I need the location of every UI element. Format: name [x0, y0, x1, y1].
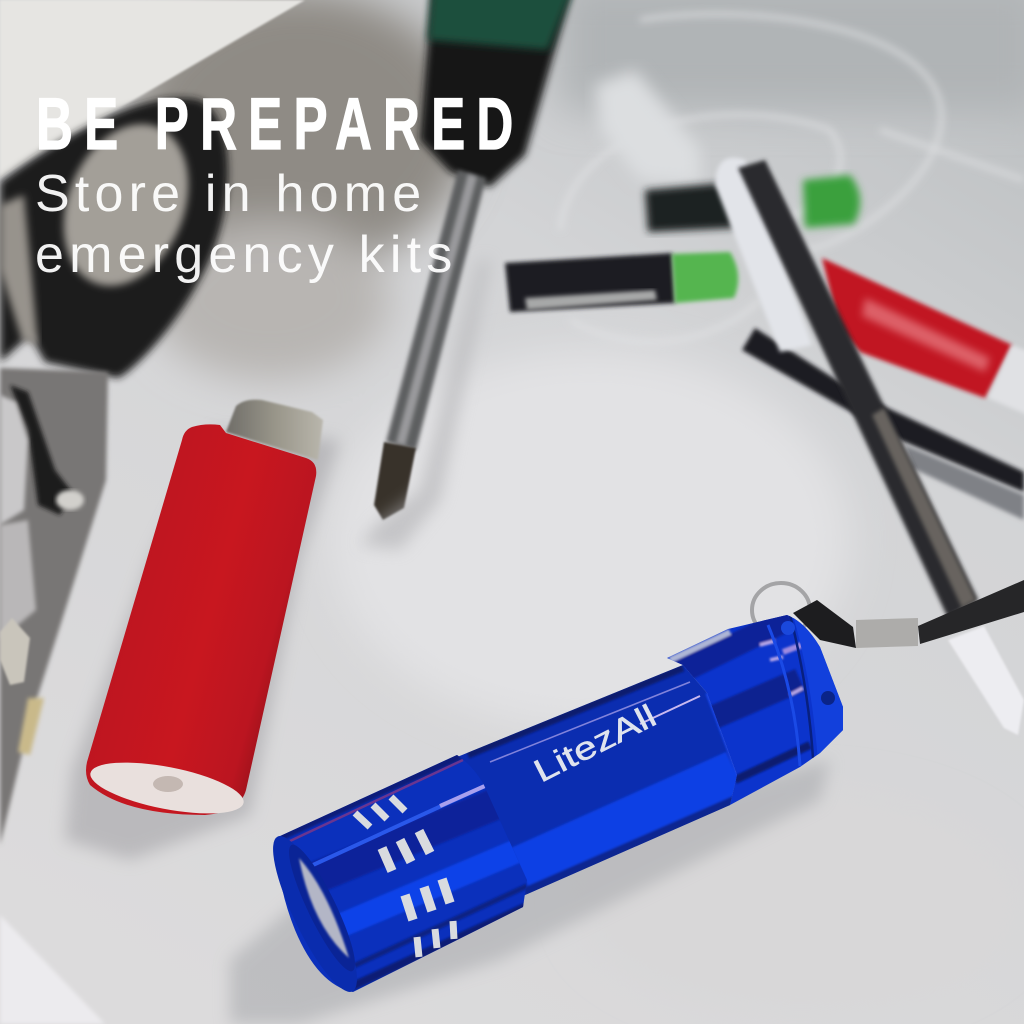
- end cap: [794, 618, 843, 755]
- front grooves: [417, 921, 454, 957]
- subtitle: Store in home: [35, 165, 426, 223]
- flashlight: [259, 605, 860, 1001]
- scissors: [0, 98, 228, 845]
- lens inner: [279, 839, 365, 977]
- white cap and long dark stylus: [715, 158, 1024, 735]
- title: BE PREPARED: [36, 84, 525, 165]
- heading block: [35, 84, 525, 284]
- flashlight shadow: [230, 760, 830, 1024]
- battery back: [645, 175, 860, 232]
- tail section: [667, 615, 843, 805]
- lanyard: [752, 580, 1024, 648]
- head: [270, 750, 535, 995]
- body: [458, 665, 737, 896]
- middle row grooves: [382, 831, 450, 920]
- shadow of lighter: [65, 430, 340, 860]
- subtitle: [35, 165, 457, 284]
- red marker: [822, 258, 1024, 416]
- lens glass: [299, 858, 349, 958]
- earbud: [595, 70, 700, 185]
- screw dots: [781, 621, 795, 635]
- subtitle: emergency kits: [35, 226, 457, 284]
- top row grooves: [355, 797, 405, 827]
- drawer front edge bottom left: [0, 915, 105, 1024]
- brand text: LitezAll: [528, 697, 662, 789]
- screwdriver: [360, 0, 572, 550]
- top left drawer shelf: [0, 0, 305, 178]
- lens rim: [259, 827, 371, 1001]
- lighter: [86, 400, 323, 823]
- cables: [560, 14, 1024, 342]
- black pen behind: [742, 328, 1024, 520]
- battery front: [505, 252, 738, 312]
